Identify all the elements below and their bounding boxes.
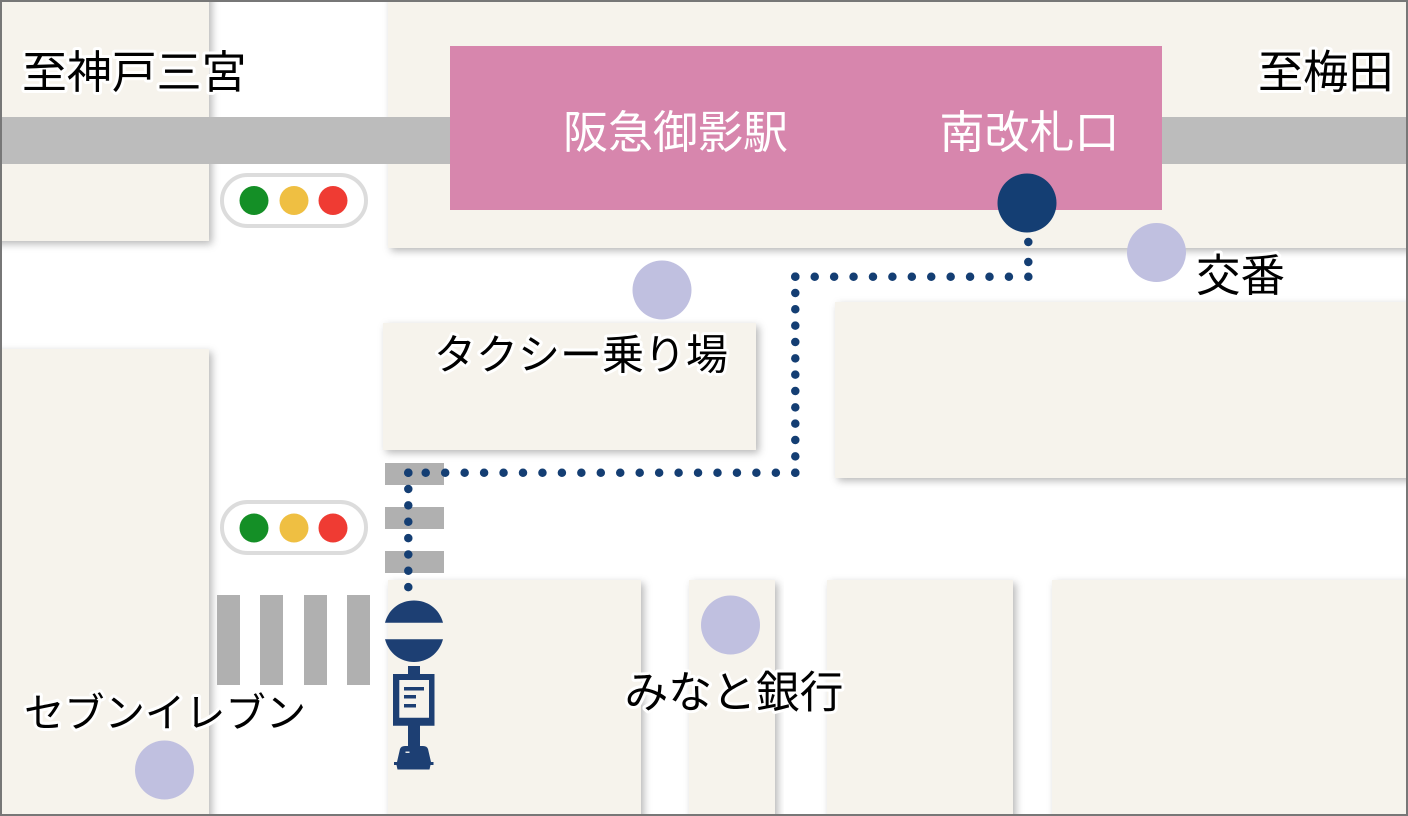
crosswalk: horizontal road	[217, 595, 370, 685]
landmark marker: taxi stand	[632, 260, 692, 320]
station name: 阪急御影駅	[563, 107, 788, 158]
landmark marker: Seven-Eleven	[135, 740, 194, 800]
label: Seven-Eleven: セブンイレブン	[24, 691, 306, 736]
landmark marker: Minato Bank	[701, 596, 760, 654]
icon: bus stop	[385, 600, 443, 770]
landmark marker: police box	[1127, 223, 1186, 282]
traffic signal: upper	[222, 175, 366, 226]
label: to Kobe Sannomiya: 至神戸三宮	[22, 47, 246, 98]
railway line	[0, 117, 1408, 164]
label: police box: 交番	[1196, 252, 1285, 301]
label: Minato Bank: みなと銀行	[624, 668, 843, 718]
south ticket gate label: 南改札口	[940, 107, 1120, 158]
station building	[450, 46, 1162, 210]
crosswalk: vertical road	[385, 463, 444, 573]
start marker: south ticket gate	[998, 174, 1056, 232]
label: to Umeda: 至梅田	[1258, 47, 1394, 98]
walking route dotted line	[408, 242, 1029, 588]
traffic signal: lower	[222, 502, 366, 553]
label: taxi stand: タクシー乗り場	[434, 332, 728, 378]
